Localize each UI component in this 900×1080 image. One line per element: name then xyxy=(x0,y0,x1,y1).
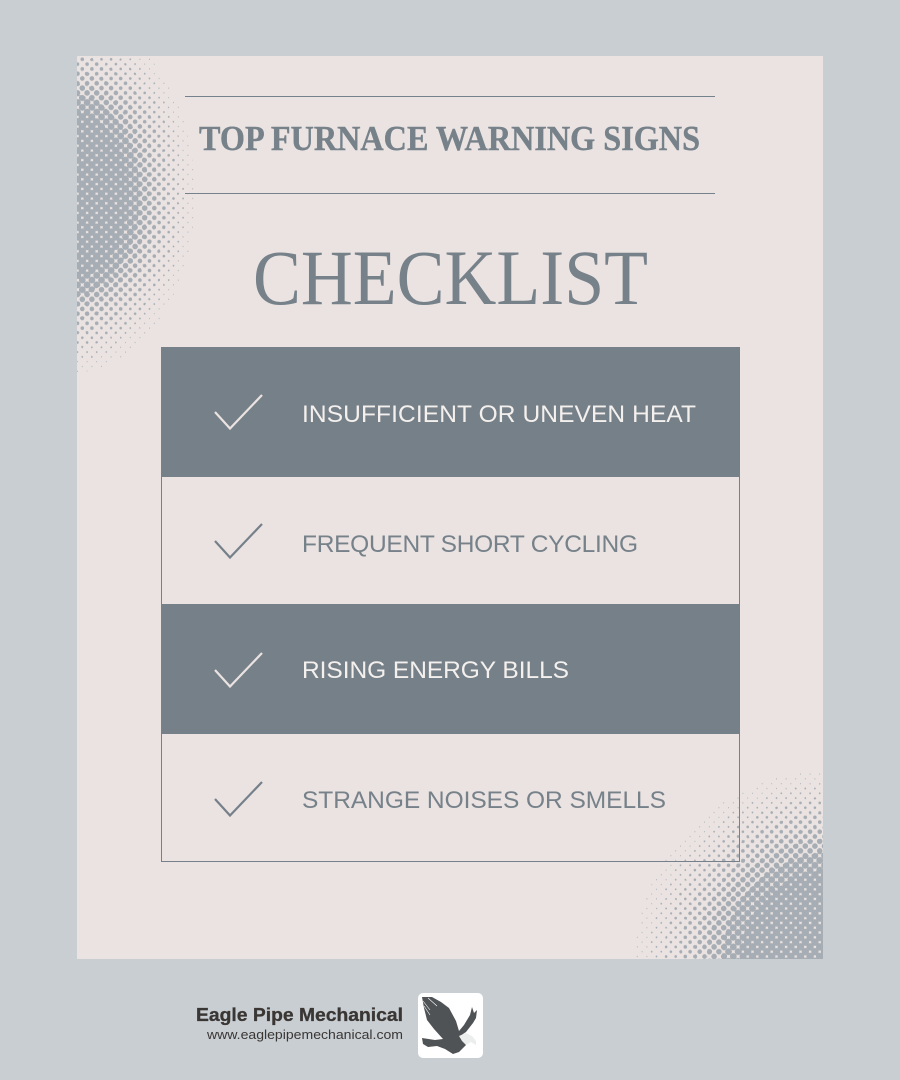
logo: eagle xyxy=(418,993,483,1058)
title: TOP FURNACE WARNING SIGNS xyxy=(199,119,700,158)
row 4: strange noises or smells: STRANGE NOISES OR SMELLS xyxy=(302,787,666,814)
row 2: frequent short cycling xyxy=(215,524,638,558)
footer: website: www.eaglepipemechanical.com xyxy=(206,1027,403,1042)
footer: company name: Eagle Pipe Mechanical xyxy=(196,1004,403,1025)
row 3: rising energy bills xyxy=(161,604,740,734)
row 1: insufficient or uneven heat xyxy=(161,347,740,477)
checklist table xyxy=(161,347,740,862)
row 2: frequent short cycling: FREQUENT SHORT CYCLING xyxy=(302,531,638,558)
row 3: rising energy bills: RISING ENERGY BILLS xyxy=(302,657,569,684)
halftone decoration: top left xyxy=(77,56,194,372)
halftone decoration: bottom right xyxy=(635,770,835,960)
panel: checklist card xyxy=(77,56,823,959)
row 4: strange noises or smells xyxy=(215,782,666,816)
infographic: top furnace warning signs checklist xyxy=(77,56,823,1058)
heading: checklist: CHECKLIST xyxy=(253,234,648,321)
row 1: insufficient or uneven heat: INSUFFICIENT OR UNEVEN HEAT xyxy=(302,401,696,428)
